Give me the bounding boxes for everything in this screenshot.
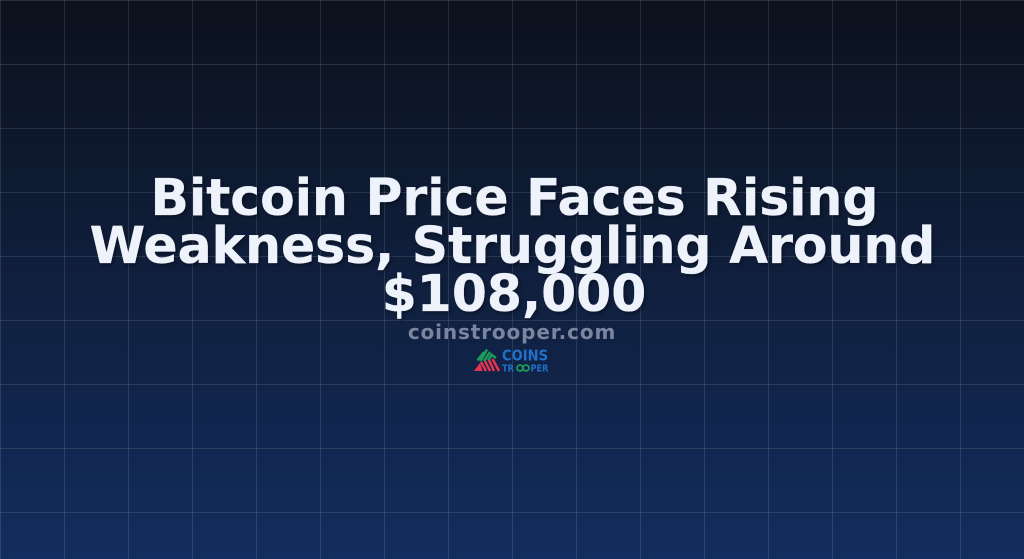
wordmark: PER	[530, 364, 549, 374]
title: Weakness, Struggling Around	[90, 216, 935, 275]
wordmark	[502, 346, 549, 374]
title: Bitcoin Price Faces Rising	[151, 168, 878, 227]
logo: Coins Trooper	[474, 346, 549, 374]
wordmark: COINS	[502, 346, 548, 364]
title	[90, 168, 935, 323]
title: $108,000	[382, 264, 646, 323]
website url: coinstrooper.com	[408, 320, 616, 344]
icon: green and red striped chart peaks	[474, 350, 499, 371]
wordmark: TR	[502, 364, 514, 374]
